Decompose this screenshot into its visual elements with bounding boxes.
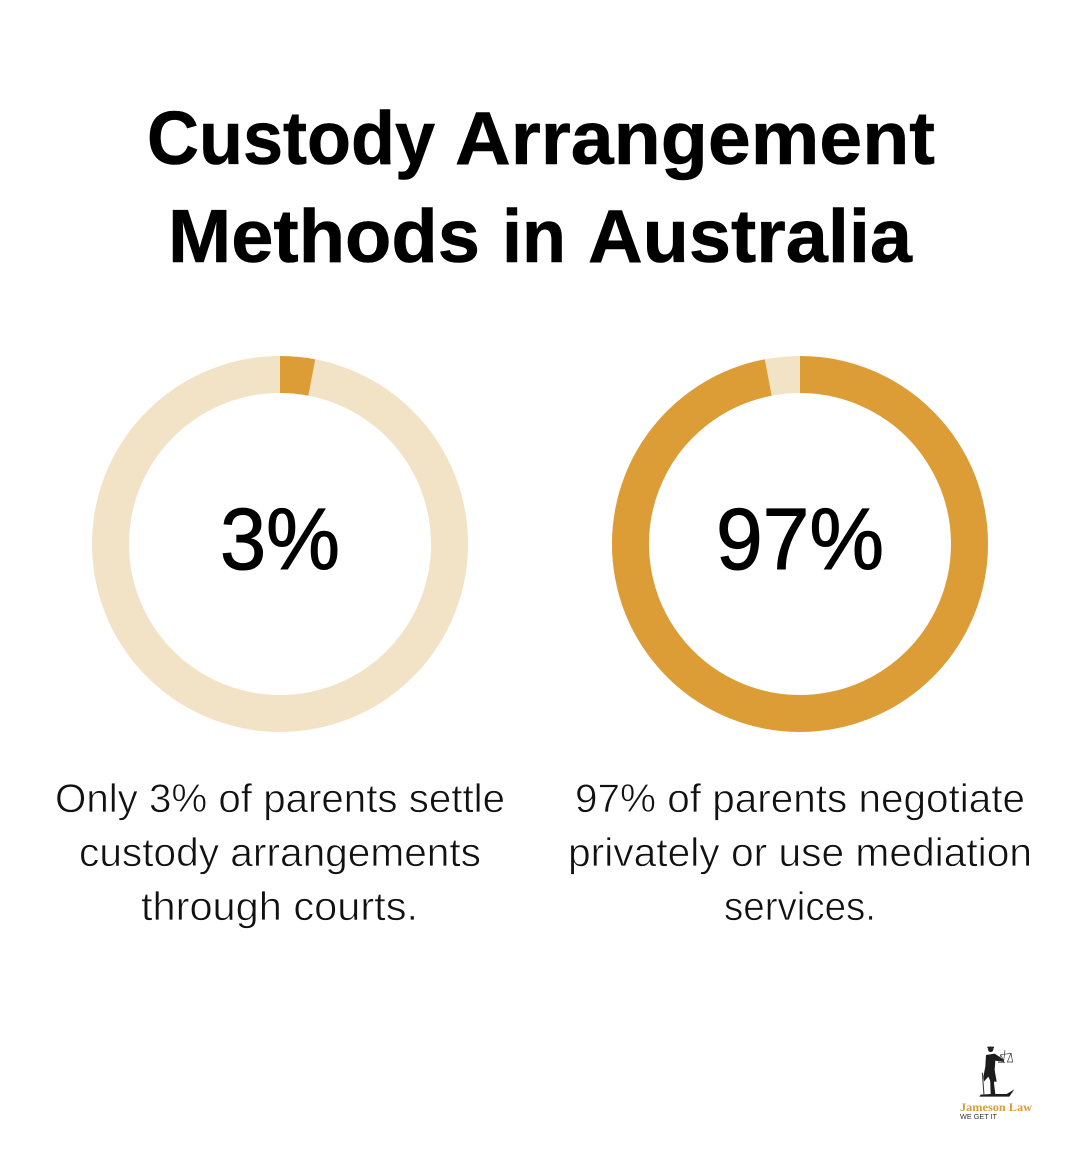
caption: negotiation: services. — [724, 885, 876, 929]
title: Methods — [168, 194, 480, 278]
panel: courts 3% — [55, 374, 505, 929]
value: 97%: 97% — [716, 491, 884, 588]
value: 3%: 3% — [220, 491, 340, 588]
title: Arrangement — [455, 96, 935, 180]
caption: courts: Only 3% of parents settle — [55, 777, 505, 821]
caption: courts — [55, 777, 505, 929]
panel: private negotiation 97% — [568, 374, 1032, 929]
caption: courts: through courts. — [141, 885, 418, 929]
title: Australia — [588, 194, 913, 278]
caption: negotiation: privately or use mediation — [568, 831, 1032, 875]
caption: courts: custody arrangements — [79, 831, 481, 875]
title: in — [502, 194, 566, 278]
title — [147, 96, 935, 278]
donut chart: 3% — [110, 374, 450, 714]
logo name: Jameson Law — [960, 1102, 1033, 1114]
caption: negotiation: 97% of parents negotiate — [575, 777, 1025, 821]
logo tagline: WE GET IT — [960, 1114, 998, 1121]
icon: lady justice with L — [979, 1047, 1014, 1097]
donut chart: 97% — [630, 374, 970, 714]
caption: negotiation — [568, 777, 1032, 929]
logo: Jameson Law — [960, 1047, 1033, 1121]
title: Custody — [147, 96, 435, 180]
